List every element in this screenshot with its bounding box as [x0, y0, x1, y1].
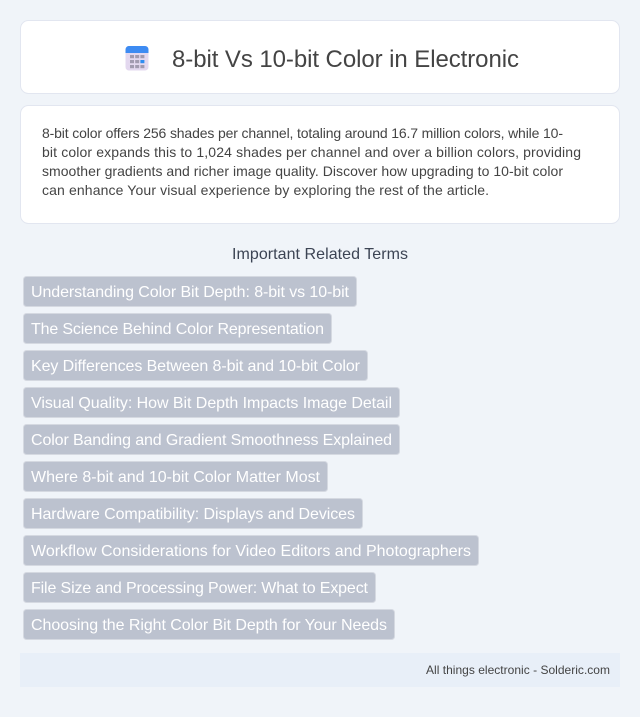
- text block: intro: bit color expands this to 1,024 shades per channel and over a billion colors, providing: [42, 144, 581, 160]
- footer: [20, 653, 620, 687]
- chip 4: [24, 388, 400, 418]
- title: 8-bit Vs 10-bit Color in Electronic: [172, 46, 519, 73]
- text block: intro: smoother gradients and richer image quality. Discover how upgrading to 10-bit color: [42, 163, 563, 179]
- chip 2: [24, 314, 332, 344]
- chip 7: Hardware Compatibility: Displays and Devices: [31, 506, 355, 523]
- chip 9: [24, 572, 376, 602]
- list of term chips: [24, 276, 478, 640]
- panel: intro paragraph: [20, 106, 620, 224]
- chip 9: File Size and Processing Power: What to Expect: [31, 580, 369, 597]
- text block: intro: can enhance Your visual experience by exploring the rest of the article.: [42, 182, 489, 198]
- text block: intro: 8-bit color offers 256 shades per channel, totaling around 16.7 million colors, while 10-: [42, 125, 563, 141]
- chip 6: Where 8-bit and 10-bit Color Matter Most: [31, 469, 321, 486]
- chip 10: Choosing the Right Color Bit Depth for Your Needs: [31, 617, 387, 634]
- chip 5: Color Banding and Gradient Smoothness Explained: [31, 432, 392, 449]
- chip 8: [24, 536, 478, 566]
- footer credit: All things electronic - Solderic.com: [426, 663, 610, 677]
- heading: related terms: Important Related Terms: [232, 246, 408, 263]
- chip 4: Visual Quality: How Bit Depth Impacts Image Detail: [31, 395, 392, 412]
- chip 10: [24, 610, 394, 640]
- chip 1: [24, 276, 356, 306]
- chip 7: [24, 498, 362, 528]
- header panel: [20, 20, 620, 94]
- chip 3: [24, 350, 368, 380]
- chip 6: [24, 462, 328, 492]
- text block: intro: [42, 125, 581, 198]
- chip 5: [24, 424, 400, 454]
- chip 3: Key Differences Between 8-bit and 10-bit Color: [31, 358, 361, 375]
- chip 1: Understanding Color Bit Depth: 8-bit vs 10-bit: [31, 284, 350, 301]
- chip 2: The Science Behind Color Representation: [31, 321, 324, 338]
- icon: calendar: [126, 46, 148, 70]
- chip 8: Workflow Considerations for Video Editors and Photographers: [31, 543, 471, 560]
